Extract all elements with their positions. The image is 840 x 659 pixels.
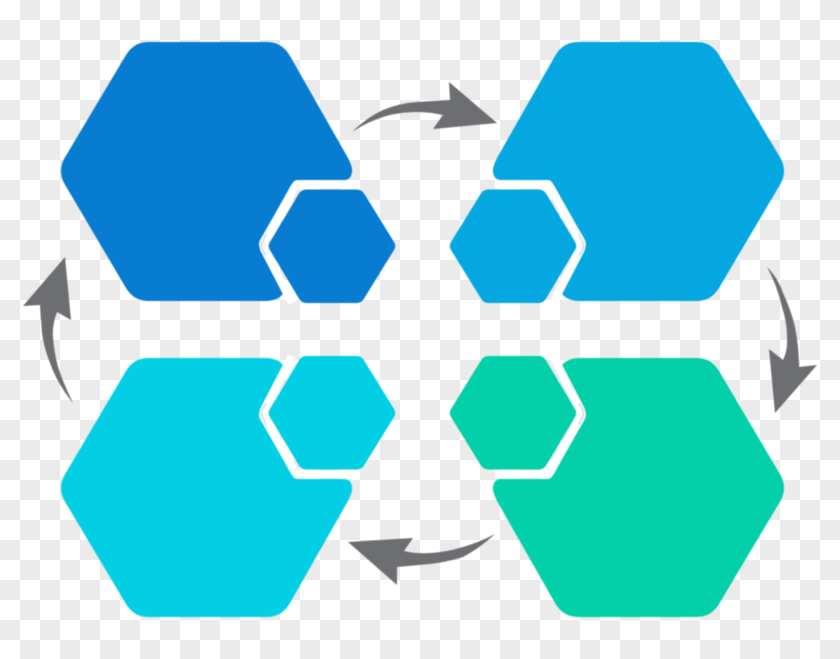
arrow: top, left to right [352, 82, 497, 132]
arrow: left, bottom to top [23, 257, 73, 403]
panel: top-right sky blue hexagon pair [450, 42, 784, 303]
arrow: bottom, right to left [348, 534, 495, 585]
panel: top-left dark blue hexagon pair [61, 42, 395, 303]
panel: bottom-left cyan hexagon pair [61, 356, 395, 617]
arrow: right, top to bottom [767, 267, 817, 413]
panel: bottom-right green hexagon pair [450, 356, 784, 617]
